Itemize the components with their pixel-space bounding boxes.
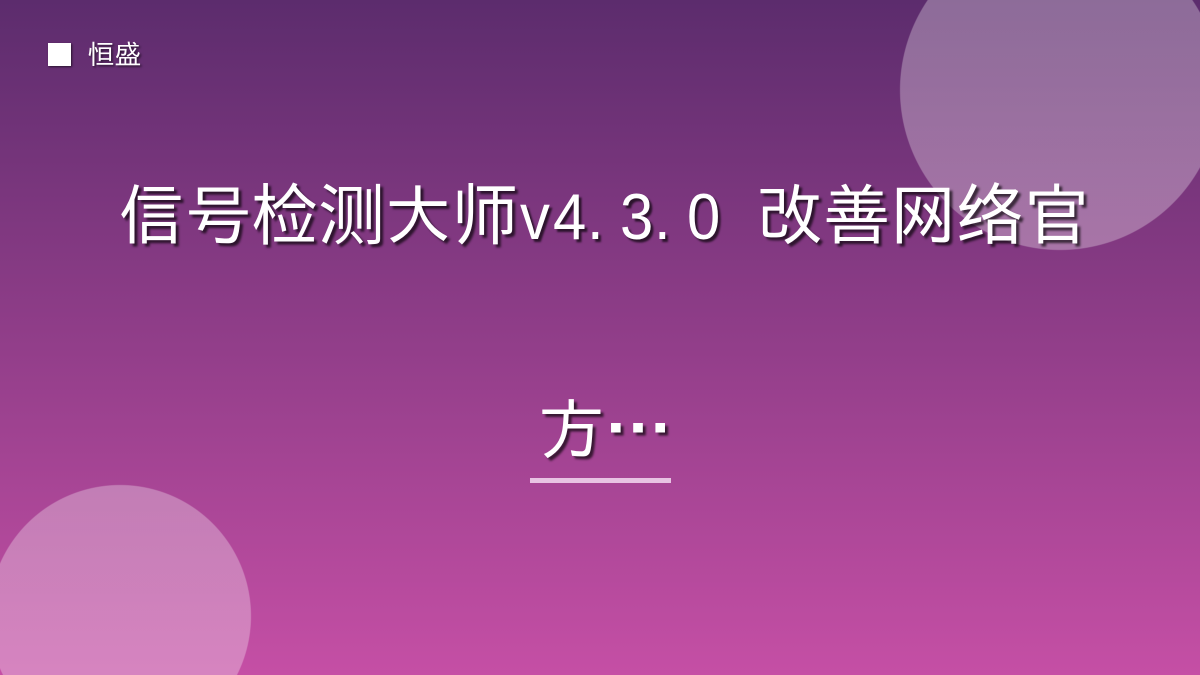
title line 1: 4 [553, 180, 587, 253]
title line 1: 0 [687, 180, 720, 253]
title line 1: 3 [620, 180, 653, 253]
title [118, 180, 1090, 462]
title underline [530, 478, 671, 483]
title line 1: 信号检测大师 改善网络官 [118, 181, 1090, 248]
title line 1: v [520, 180, 550, 253]
icon: white square [48, 43, 71, 66]
brand label [48, 41, 142, 68]
decorative circle top right [890, 0, 1200, 260]
brand name: 恒盛 [88, 41, 142, 68]
decorative circle bottom left [0, 475, 260, 675]
title line 2: 方… [538, 395, 671, 462]
title line 1: . [587, 180, 603, 253]
title line 1: . [654, 180, 670, 253]
